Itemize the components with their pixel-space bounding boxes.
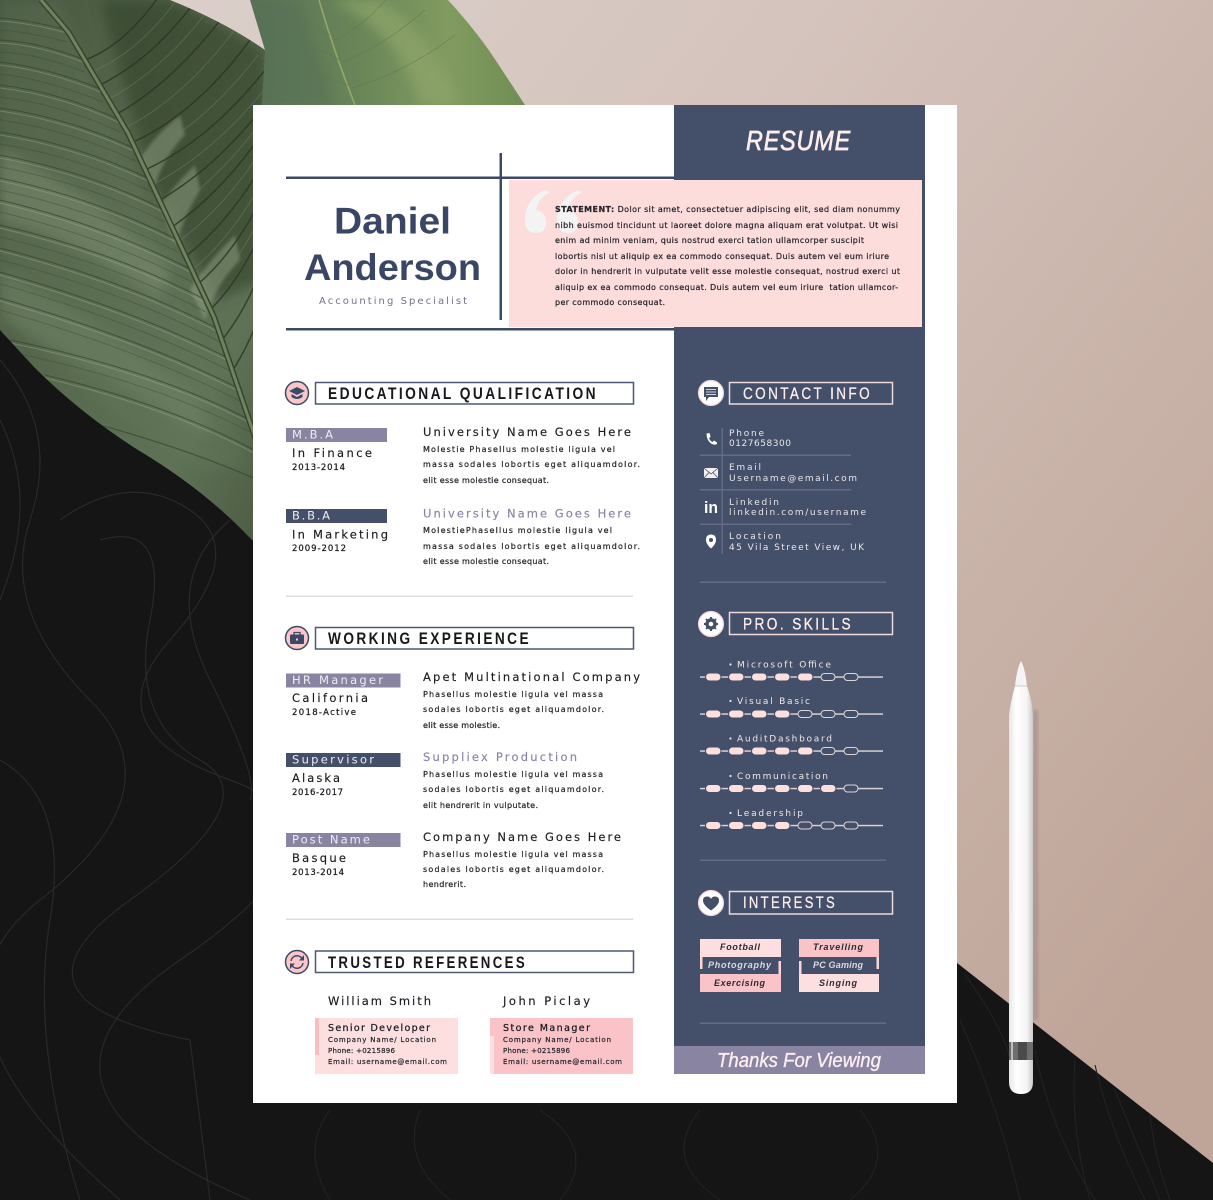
entry: Supervisor: sodales lobortis eget aliquamdolor. bbox=[423, 785, 604, 794]
entry: M.B.A: University Name Goes Here bbox=[423, 425, 631, 439]
text: statement paragraph: aliquip ex ea commodo consequat. Duis autem vel eum iriure tation ullamcor- bbox=[555, 283, 898, 292]
contact: linkedin bbox=[704, 498, 866, 518]
text: statement paragraph bbox=[555, 205, 900, 307]
apple pencil bbox=[1009, 661, 1038, 1094]
entry: Post Name: Company Name Goes Here bbox=[423, 830, 621, 844]
contact: linkedin: Linkedin bbox=[729, 498, 779, 508]
reference: John Piclay: Email: username@email.com bbox=[503, 1058, 622, 1066]
entry: Post Name bbox=[286, 830, 621, 889]
interests: column one: Exercising bbox=[714, 978, 766, 988]
reference: John Piclay: Store Manager bbox=[503, 1023, 590, 1034]
heading: name: Anderson bbox=[304, 247, 481, 288]
footer band: thanks for viewing: Thanks For Viewing bbox=[717, 1050, 881, 1072]
text: statement paragraph: enim ad minim veniam, quis nostrud exerci tation ullamcorper suscipit bbox=[555, 236, 864, 245]
contact: phone: 0127658300 bbox=[729, 439, 791, 449]
section: educational qualification bbox=[286, 382, 640, 566]
resume sheet bbox=[253, 105, 957, 1103]
entry: B.B.A: elit esse molestie consequat. bbox=[423, 557, 549, 566]
interests: column two bbox=[799, 939, 879, 992]
entry: HR Manager: HR Manager bbox=[292, 673, 383, 687]
section: interests bbox=[698, 890, 892, 992]
entry: M.B.A: M.B.A bbox=[292, 428, 333, 442]
reference: John Piclay: John Piclay bbox=[502, 994, 590, 1008]
entry: HR Manager bbox=[286, 670, 640, 730]
contact: phone bbox=[706, 429, 791, 449]
entry: M.B.A: massa sodales lobortis eget aliquamdolor. bbox=[423, 460, 640, 469]
entry: Supervisor: elit hendrerit in vulputate. bbox=[423, 801, 538, 810]
skill: Communication bbox=[700, 772, 883, 792]
heading: name: Daniel bbox=[334, 200, 451, 242]
entry: M.B.A: In Finance bbox=[292, 446, 372, 460]
entry: HR Manager: sodales lobortis eget aliquamdolor. bbox=[423, 705, 604, 714]
entry: Post Name: Post Name bbox=[292, 832, 370, 846]
entry: M.B.A: elit esse molestie consequat. bbox=[423, 476, 549, 485]
interests: column one: Photography bbox=[708, 960, 772, 970]
contact: location: 45 Vila Street View, UK bbox=[729, 543, 865, 553]
icon: graduation cap bbox=[286, 382, 308, 404]
reference: William Smith: Email: username@email.com bbox=[328, 1058, 447, 1066]
icon: gear bbox=[698, 612, 724, 636]
skill: AuditDashboard: AuditDashboard bbox=[737, 734, 832, 744]
text: statement paragraph: nibh euismod tincidunt ut laoreet dolore magna aliquam erat volutpat. Ut wisi bbox=[555, 221, 898, 230]
heading: RESUME: RESUME bbox=[746, 125, 851, 156]
text: statement paragraph: per commodo consequat. bbox=[555, 298, 665, 307]
entry: Supervisor: 2016-2017 bbox=[292, 788, 343, 798]
skill: Leadership: Leadership bbox=[737, 809, 803, 819]
entry: M.B.A bbox=[286, 425, 640, 485]
contact: email: Email bbox=[729, 463, 761, 473]
entry: Post Name: Phasellus molestie ligula vel massa bbox=[423, 850, 603, 859]
skill: AuditDashboard bbox=[700, 734, 883, 755]
entry: Post Name: hendrerit. bbox=[423, 880, 466, 889]
contact: location: Location bbox=[729, 532, 781, 542]
reference: William Smith: Company Name/ Location bbox=[328, 1036, 436, 1044]
entry: B.B.A: University Name Goes Here bbox=[423, 506, 631, 520]
interests: column one bbox=[700, 939, 781, 992]
heading: name bbox=[304, 200, 481, 288]
heading box bbox=[730, 892, 892, 914]
heading box: EDUCATIONAL QUALIFICATION bbox=[328, 384, 598, 403]
entry: Supervisor: Suppliex Production bbox=[423, 750, 577, 764]
entry: B.B.A: B.B.A bbox=[292, 508, 330, 522]
entry: M.B.A: Molestie Phasellus molestie ligula vel bbox=[423, 445, 615, 454]
text: statement paragraph: lobortis nisl ut aliquip ex ea commodo consequat. Duis autem vel eum iriure bbox=[555, 252, 889, 261]
panel: statement bbox=[509, 180, 922, 327]
leaf: large dark green leaf bbox=[0, 0, 270, 545]
entry: Post Name: 2013-2014 bbox=[292, 868, 344, 878]
reference: William Smith: William Smith bbox=[328, 994, 431, 1008]
reference: William Smith bbox=[315, 994, 458, 1074]
heading box: WORKING EXPERIENCE bbox=[328, 629, 531, 648]
text: job title: Accounting Specialist bbox=[319, 296, 467, 307]
entry: HR Manager: Apet Multinational Company bbox=[423, 670, 640, 684]
icon: heart bbox=[698, 890, 724, 916]
entry: B.B.A: In Marketing bbox=[292, 528, 388, 542]
leaf: light olive leaf at top bbox=[245, 0, 535, 110]
skill: Visual Basic bbox=[700, 697, 883, 718]
heading box: PRO. SKILLS bbox=[743, 614, 853, 633]
icon: sync arrows bbox=[286, 950, 308, 974]
interests: column two: Travelling bbox=[813, 942, 864, 952]
interests: column two: Singing bbox=[819, 978, 858, 988]
entry: B.B.A: 2009-2012 bbox=[292, 544, 346, 554]
contact: phone: Phone bbox=[729, 429, 764, 439]
entry: Post Name: Basque bbox=[292, 851, 346, 865]
text: statement paragraph: dolor in hendrerit in vulputate velit esse molestie consequat, nostrud exerci ut bbox=[555, 267, 900, 276]
skill: Microsoft Office bbox=[700, 660, 883, 681]
header rules bbox=[286, 153, 674, 330]
contact: email: Username@email.com bbox=[729, 474, 857, 484]
icon: quotation mark bbox=[525, 190, 582, 233]
heading box: TRUSTED REFERENCES bbox=[328, 953, 527, 972]
entry: HR Manager: 2018-Active bbox=[292, 708, 356, 718]
icon: chat bubble bbox=[698, 380, 724, 406]
skill: Leadership bbox=[700, 809, 883, 830]
heading box: INTERESTS bbox=[743, 893, 837, 912]
entry: HR Manager: Phasellus molestie ligula vel massa bbox=[423, 690, 603, 699]
heading box: CONTACT INFO bbox=[743, 384, 872, 403]
skill: Communication: Communication bbox=[737, 772, 828, 782]
section: pro skills bbox=[698, 612, 892, 830]
interests: column one: Football bbox=[720, 942, 760, 952]
entry: Supervisor bbox=[286, 750, 604, 810]
contact: linkedin: in bbox=[704, 498, 718, 517]
entry: Supervisor: Alaska bbox=[292, 771, 340, 785]
skill: Microsoft Office: Microsoft Office bbox=[737, 660, 831, 670]
text: statement paragraph: STATEMENT: Dolor sit amet, consectetuer adipiscing elit, sed diam nonummy bbox=[555, 205, 900, 214]
entry: Supervisor: Phasellus molestie ligula vel massa bbox=[423, 770, 603, 779]
reference: John Piclay: Company Name/ Location bbox=[503, 1036, 611, 1044]
reference: John Piclay bbox=[490, 994, 633, 1074]
entry: B.B.A: massa sodales lobortis eget aliquamdolor. bbox=[423, 542, 640, 551]
footer band: thanks for viewing bbox=[674, 1046, 925, 1074]
icon: briefcase bbox=[286, 626, 308, 650]
entry: Post Name: sodales lobortis eget aliquamdolor. bbox=[423, 865, 604, 874]
entry: B.B.A bbox=[286, 506, 640, 566]
section: trusted references bbox=[286, 950, 634, 1074]
entry: M.B.A: 2013-2014 bbox=[292, 463, 345, 473]
reference: William Smith: Phone: +0215896 bbox=[328, 1047, 396, 1055]
section: working experience bbox=[286, 626, 640, 889]
contact: email bbox=[704, 463, 857, 484]
reference: John Piclay: Phone: +0215896 bbox=[503, 1047, 571, 1055]
contact: location bbox=[706, 532, 865, 553]
skill: Visual Basic: Visual Basic bbox=[737, 697, 810, 707]
entry: B.B.A: MolestiePhasellus molestie ligula vel bbox=[423, 526, 612, 535]
reference: William Smith: Senior Developer bbox=[328, 1023, 430, 1034]
interests: column two: PC Gaming bbox=[813, 960, 864, 970]
panel: navy sidebar bbox=[674, 105, 925, 1074]
contact: linkedin: linkedin.com/username bbox=[729, 508, 866, 518]
entry: Supervisor: Supervisor bbox=[292, 752, 374, 766]
entry: HR Manager: elit esse molestie. bbox=[423, 721, 500, 730]
section: contact info bbox=[698, 380, 892, 583]
entry: HR Manager: California bbox=[292, 691, 368, 705]
